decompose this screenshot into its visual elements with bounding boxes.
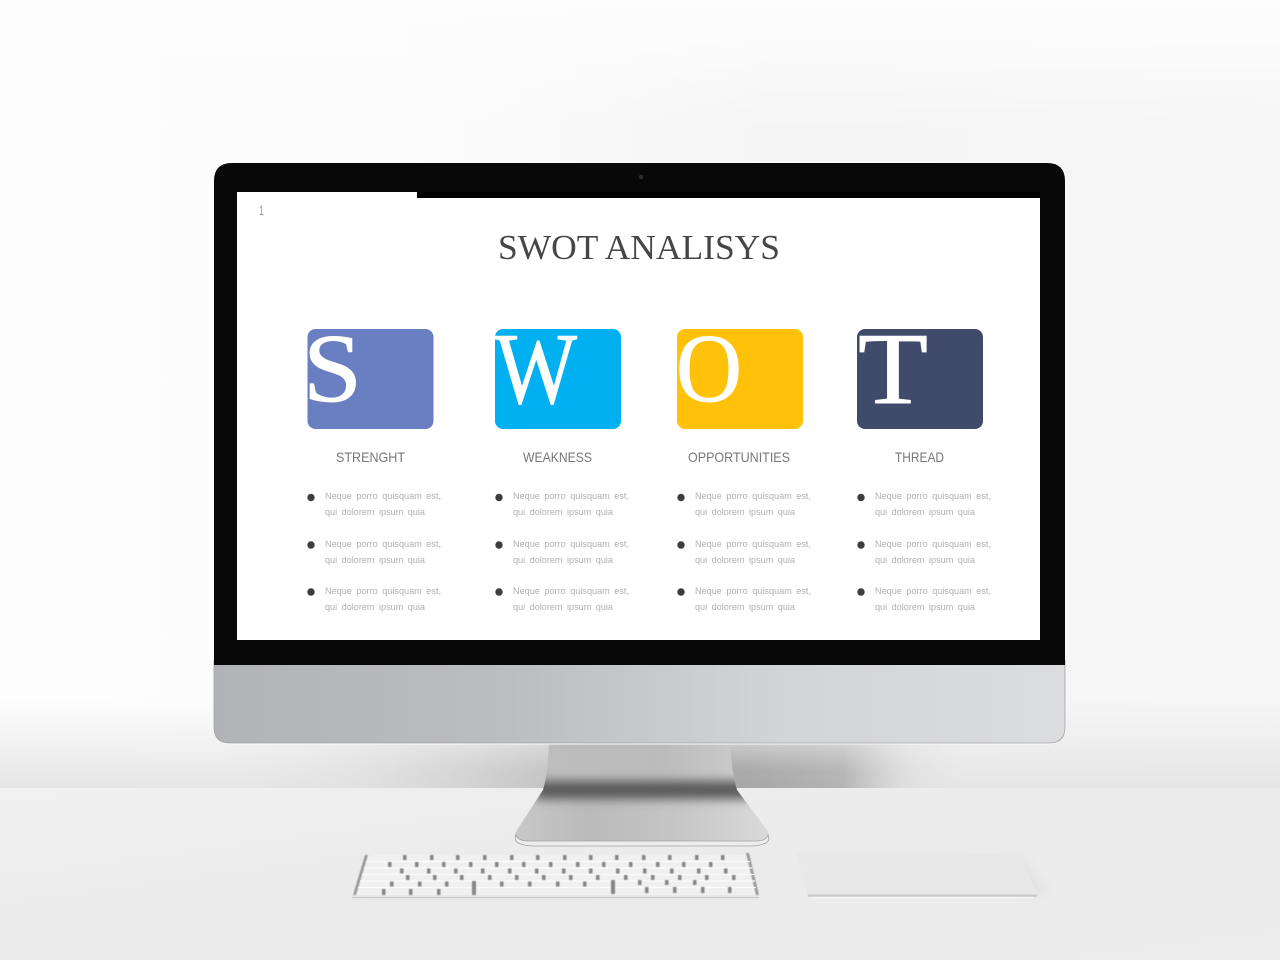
background: wall and desk [0,718,1280,960]
S tile: S [303,315,362,423]
heading: opportunities: OPPORTUNITIES [688,449,790,465]
strength bullets: qui dolorem ipsum quia [325,555,425,565]
slide screen [237,192,1040,640]
strength bullets: qui dolorem ipsum quia [325,507,425,517]
opportunities bullets: Neque porro quisquam est, [695,539,811,549]
opportunities bullets: qui dolorem ipsum quia [695,507,795,517]
thread bullets: Neque porro quisquam est, [875,491,991,501]
opportunities bullets [677,491,811,612]
strength bullets: Neque porro quisquam est, [325,586,441,596]
thread bullets: qui dolorem ipsum quia [875,555,975,565]
trackpad [797,853,1048,898]
heading: strenght: STRENGHT [336,449,405,465]
T tile [857,313,983,429]
heading: weakness: WEAKNESS [523,449,592,465]
weakness bullets: Neque porro quisquam est, [513,586,629,596]
monitor [212,162,1066,744]
opportunities bullets: qui dolorem ipsum quia [695,602,795,612]
webcam [639,175,643,179]
strength bullets [307,491,441,612]
thread bullets: Neque porro quisquam est, [875,586,991,596]
panel: thread [857,313,991,612]
O tile [676,315,803,429]
heading: thread: THREAD [895,449,944,465]
weakness bullets: Neque porro quisquam est, [513,539,629,549]
weakness bullets: qui dolorem ipsum quia [513,602,613,612]
O tile: O [676,315,742,423]
monitor stand [510,744,775,846]
strength bullets: Neque porro quisquam est, [325,491,441,501]
weakness bullets: qui dolorem ipsum quia [513,507,613,517]
panel: weakness [495,313,629,612]
monitor bezel [214,163,1065,665]
panel: opportunities [676,315,811,612]
title: SWOT ANALISYS [498,228,780,267]
W tile: W [495,313,578,426]
opportunities bullets: Neque porro quisquam est, [695,491,811,501]
monitor chin [214,660,1065,743]
S tile [303,315,434,429]
thread bullets: Neque porro quisquam est, [875,539,991,549]
strength bullets: Neque porro quisquam est, [325,539,441,549]
weakness bullets: Neque porro quisquam est, [513,491,629,501]
panel: strength [303,315,441,612]
weakness bullets [495,491,629,612]
thread bullets: qui dolorem ipsum quia [875,507,975,517]
thread bullets: qui dolorem ipsum quia [875,602,975,612]
opportunities bullets: Neque porro quisquam est, [695,586,811,596]
thread bullets [857,491,991,612]
T tile: T [858,313,928,426]
keyboard [352,853,759,900]
strength bullets: qui dolorem ipsum quia [325,602,425,612]
slide number: 1 [259,202,264,218]
monitor rim [212,162,1066,744]
weakness bullets: qui dolorem ipsum quia [513,555,613,565]
opportunities bullets: qui dolorem ipsum quia [695,555,795,565]
